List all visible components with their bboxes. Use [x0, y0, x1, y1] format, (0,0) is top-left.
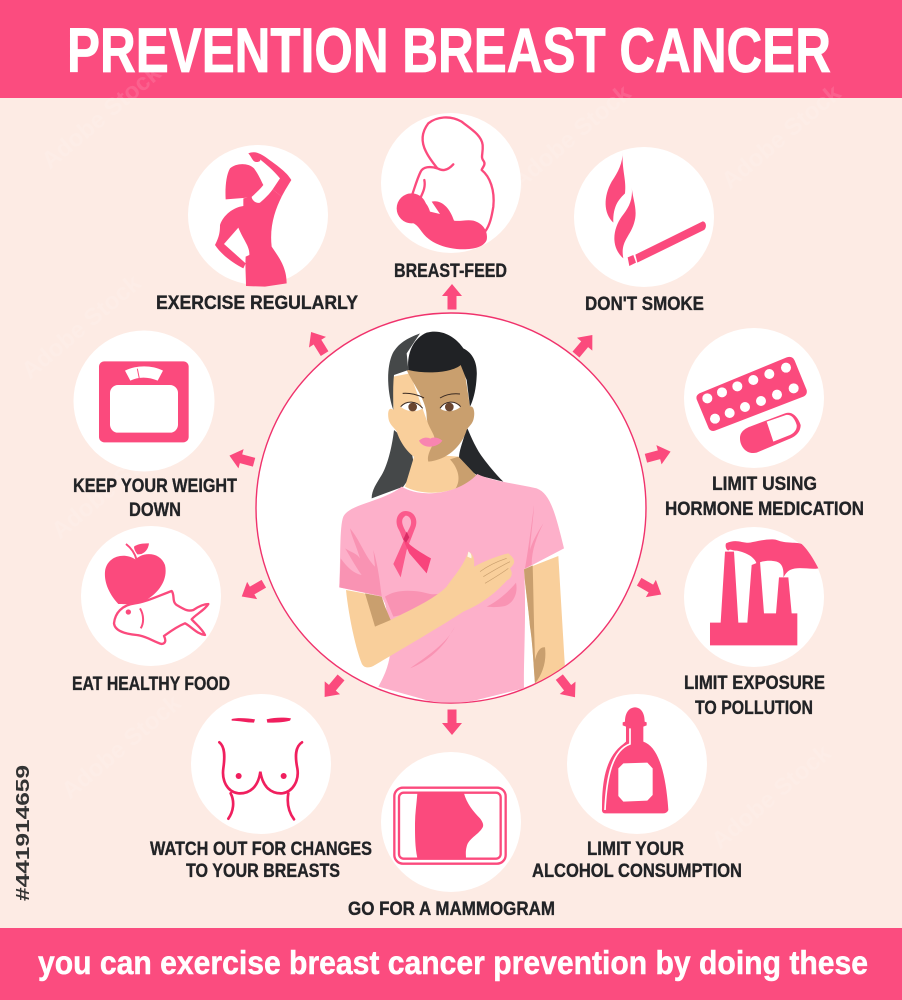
label: DON'T SMOKE [585, 294, 704, 315]
panel: limit alcohol [532, 694, 742, 882]
label: ALCOHOL CONSUMPTION [532, 861, 742, 882]
label: TO POLLUTION [695, 698, 813, 719]
panel: eat healthy food [72, 526, 230, 695]
label: TO YOUR BREASTS [186, 861, 340, 882]
arrow: to exercise [303, 327, 333, 359]
icon: apple and fish [105, 543, 208, 644]
icon: mother and baby [397, 117, 494, 249]
panel: go for a mammogram [348, 752, 555, 920]
label: GO FOR A MAMMOGRAM [348, 899, 555, 920]
arms [346, 552, 514, 667]
hair top [388, 333, 420, 410]
lips [419, 438, 442, 447]
arrow: to breast-feed [442, 284, 462, 310]
icon: scale [99, 361, 189, 442]
panel: limit hormone medication [665, 328, 864, 520]
text: Adobe Stock [507, 79, 637, 195]
arrow: to don't smoke [568, 329, 600, 361]
icon: factory [710, 539, 818, 645]
arrow: to alcohol [551, 671, 583, 703]
label: LIMIT USING [712, 474, 817, 495]
arrow: to healthy food [237, 575, 269, 605]
icon: mammogram [394, 788, 506, 864]
label: LIMIT EXPOSURE [684, 673, 825, 694]
woman illustration [339, 332, 565, 707]
eyes [401, 393, 461, 411]
arrow: to weight [227, 446, 257, 472]
header band [0, 0, 902, 98]
text: Adobe Stock [37, 59, 167, 175]
label [665, 474, 864, 520]
text: Adobe Stock [717, 79, 847, 195]
text: Adobe Stock [707, 739, 837, 855]
icon: cigarette [606, 152, 706, 266]
label: KEEP YOUR WEIGHT [73, 476, 237, 497]
arrow: to breast changes [317, 671, 349, 703]
central circle with woman [256, 313, 646, 707]
label: EXERCISE REGULARLY [156, 293, 358, 314]
text: Adobe Stock [17, 269, 147, 385]
stock id: #441914659 [13, 765, 33, 901]
label [532, 839, 742, 882]
shirt shadows [339, 528, 382, 596]
panel: keep your weight down [73, 330, 237, 521]
icon: breasts [219, 718, 302, 819]
label: DOWN [129, 500, 181, 521]
label [150, 839, 372, 882]
shirt [339, 474, 564, 707]
label: LIMIT YOUR [587, 839, 684, 860]
arrow: to mammogram [442, 710, 462, 735]
panel: don't smoke [574, 147, 714, 315]
neck [405, 453, 477, 493]
panel: limit exposure to pollution [684, 527, 825, 719]
label: BREAST-FEED [394, 261, 507, 282]
icon: pills [696, 357, 807, 453]
panel: breast-feed [381, 113, 521, 282]
arrow: to pollution [634, 573, 666, 603]
back hair [372, 430, 415, 498]
label: EAT HEALTHY FOOD [72, 674, 230, 695]
label: HORMONE MEDICATION [665, 499, 864, 520]
arrow: to hormone medication [643, 442, 673, 468]
label [73, 476, 237, 521]
face [388, 374, 434, 457]
icon: exercising woman [215, 152, 291, 287]
panel: watch for changes [150, 694, 372, 882]
icon: bottle [602, 707, 668, 813]
panel: exercise regularly [156, 145, 358, 314]
label: WATCH OUT FOR CHANGES [150, 839, 372, 860]
text: Adobe Stock [47, 429, 177, 545]
label [684, 673, 825, 719]
footer band [0, 928, 902, 1000]
pink ribbon [393, 511, 431, 577]
text: Adobe Stock [57, 689, 187, 805]
